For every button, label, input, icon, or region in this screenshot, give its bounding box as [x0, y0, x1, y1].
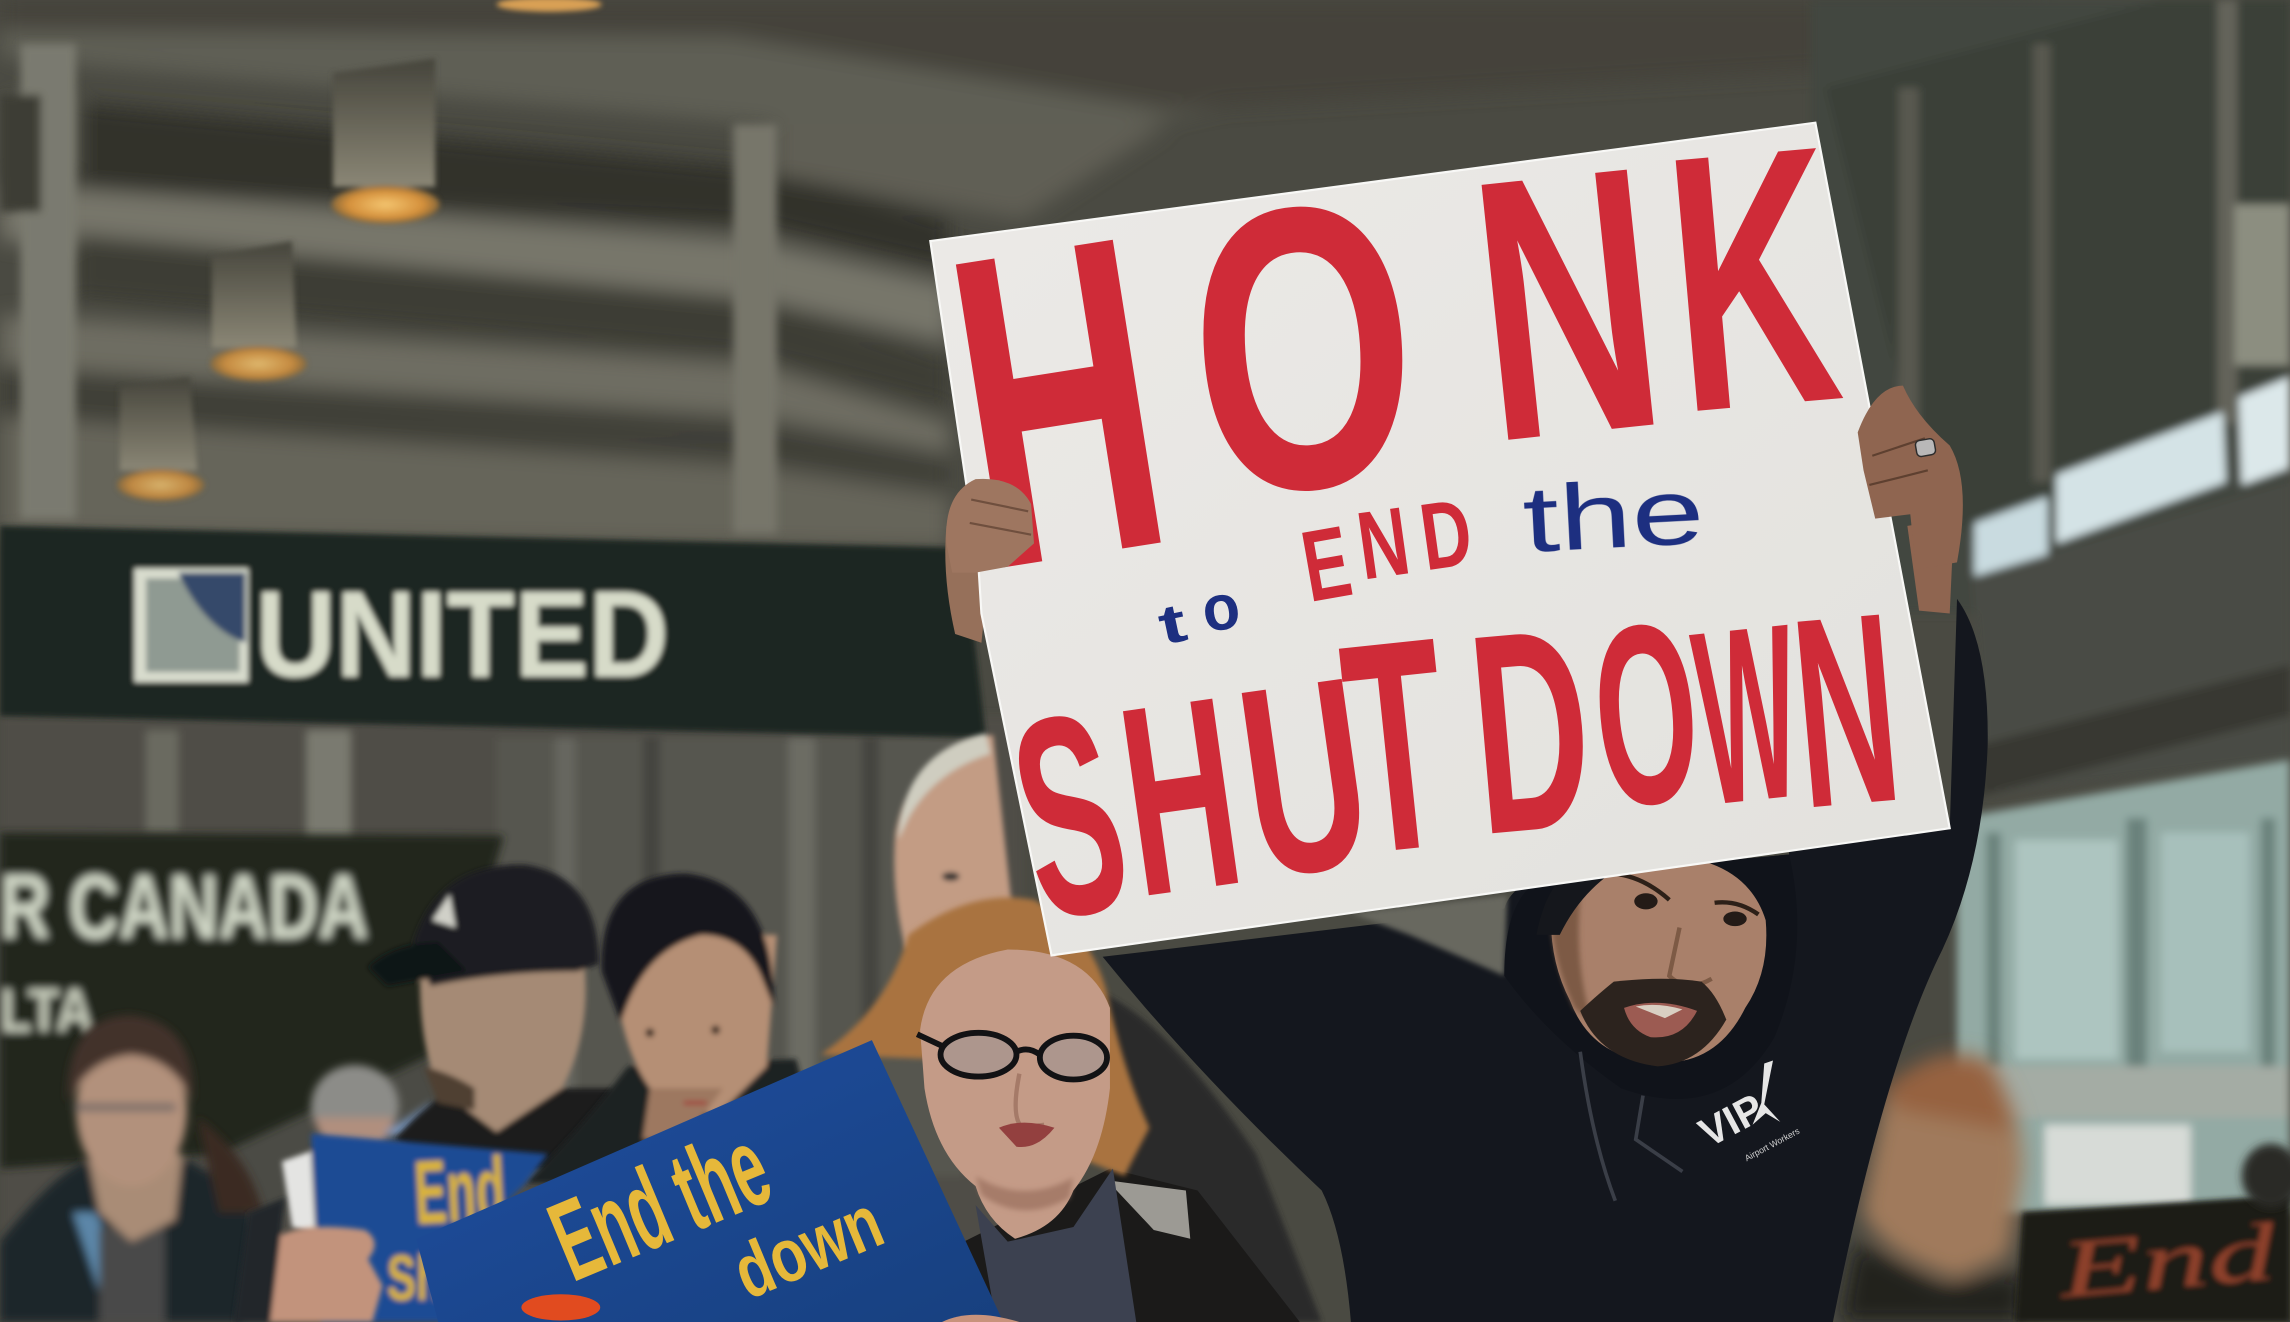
HONK	[923, 70, 1852, 664]
sign board	[930, 123, 1950, 955]
man's eyes and brows	[1614, 874, 1758, 926]
VIP logo on hoodie: Airport Workers	[1743, 1125, 1802, 1163]
person: woman with glasses	[821, 897, 1300, 1322]
person: man in black cap	[368, 865, 613, 1169]
script sign text: End	[2054, 1205, 2281, 1315]
END: D	[1414, 479, 1478, 591]
HONK: H	[923, 142, 1194, 664]
END	[1294, 479, 1478, 624]
person: older man behind woman	[894, 733, 1015, 950]
background gap above shoulder	[1351, 895, 1507, 976]
VIP logo on hoodie	[1691, 1061, 1802, 1163]
SHUTDOWN: S	[989, 649, 1150, 981]
person: man in glasses far left	[0, 1015, 263, 1322]
hand on large sign	[942, 1315, 1019, 1322]
SHUTDOWN	[989, 556, 1909, 981]
face shadow side	[1551, 884, 1592, 1023]
SHUTDOWN: W	[1683, 572, 1811, 858]
VIP logo on hoodie: VIP	[1691, 1085, 1771, 1156]
dark protest sign bottom right	[2015, 1195, 2290, 1322]
United wordmark: UNITED	[256, 565, 669, 702]
SHUTDOWN: U	[1224, 619, 1386, 936]
woman's glasses	[917, 1033, 1107, 1080]
hoodie drawstrings	[1580, 1052, 1682, 1201]
woman's dark jacket	[964, 1169, 1300, 1322]
background person: right with glasses	[1840, 1054, 2023, 1322]
the: the	[1520, 458, 1707, 572]
man's nose	[1669, 928, 1712, 985]
blue sign: small	[282, 1134, 548, 1322]
left hand fingers over sign	[946, 479, 1034, 573]
icon: United globe logo	[134, 568, 248, 682]
hand-lettered sign	[923, 70, 1963, 981]
to: t	[1153, 591, 1192, 657]
HONK: N	[1457, 88, 1679, 521]
black baseball cap	[368, 865, 599, 986]
white paper behind small sign	[282, 1151, 315, 1234]
background: ceiling columns	[0, 44, 777, 533]
Air Canada wordmark: R CANADA	[0, 857, 368, 958]
beanie under hood	[1536, 860, 1633, 935]
SHUTDOWN: H	[1105, 639, 1256, 954]
woman's hair	[821, 897, 1149, 1176]
SHUTDOWN: N	[1783, 556, 1909, 865]
sign lower text: LTA	[0, 975, 93, 1044]
SHUTDOWN: T	[1330, 573, 1463, 917]
END: N	[1351, 486, 1416, 600]
man's beard and mouth	[1580, 979, 1726, 1066]
SHUTDOWN: D	[1459, 569, 1603, 895]
glass facade	[1957, 760, 2290, 1212]
HONK: O	[1177, 116, 1429, 580]
building bright windows	[1975, 377, 2290, 577]
man's face	[1551, 855, 1766, 1062]
Air Canada sign	[0, 833, 504, 1169]
scarf pattern	[1107, 1180, 1190, 1239]
woman's face and neck	[920, 950, 1110, 1239]
woman's shirt	[976, 1169, 1136, 1322]
blue sign: large	[416, 1040, 1019, 1322]
United sign	[0, 526, 986, 738]
HONK: K	[1654, 70, 1852, 490]
woman's chin shadow	[976, 1176, 1073, 1210]
right arm wrist	[1907, 519, 1954, 614]
person: man in leather jacket behind	[1103, 993, 1322, 1322]
hand holding small sign	[234, 1198, 383, 1322]
to: o	[1197, 570, 1244, 646]
person: background grey-haired head	[311, 1065, 438, 1147]
shutdown fragment: down	[722, 1179, 895, 1316]
orange microphone	[521, 1294, 600, 1321]
End the: End the	[533, 1103, 787, 1306]
blue sign: small: Sh	[387, 1242, 443, 1314]
hood	[1504, 855, 1797, 1099]
END: E	[1294, 506, 1359, 624]
background: building right side	[1811, 0, 2290, 1212]
SHUTDOWN: O	[1583, 569, 1710, 862]
small sign text: End	[412, 1138, 508, 1244]
right hand fingers over sign	[1858, 386, 1963, 570]
hoodie body and raised arms	[1103, 599, 1988, 1322]
background: lower terminal wall	[0, 716, 1022, 1322]
to	[1153, 570, 1244, 657]
man holding sign	[945, 519, 1988, 1322]
wedding ring	[1915, 438, 1936, 457]
woman's nose and mouth	[1016, 1074, 1044, 1128]
person: young man looking down	[526, 874, 818, 1183]
left wrist	[945, 526, 993, 643]
background: ceiling lights	[117, 0, 602, 501]
